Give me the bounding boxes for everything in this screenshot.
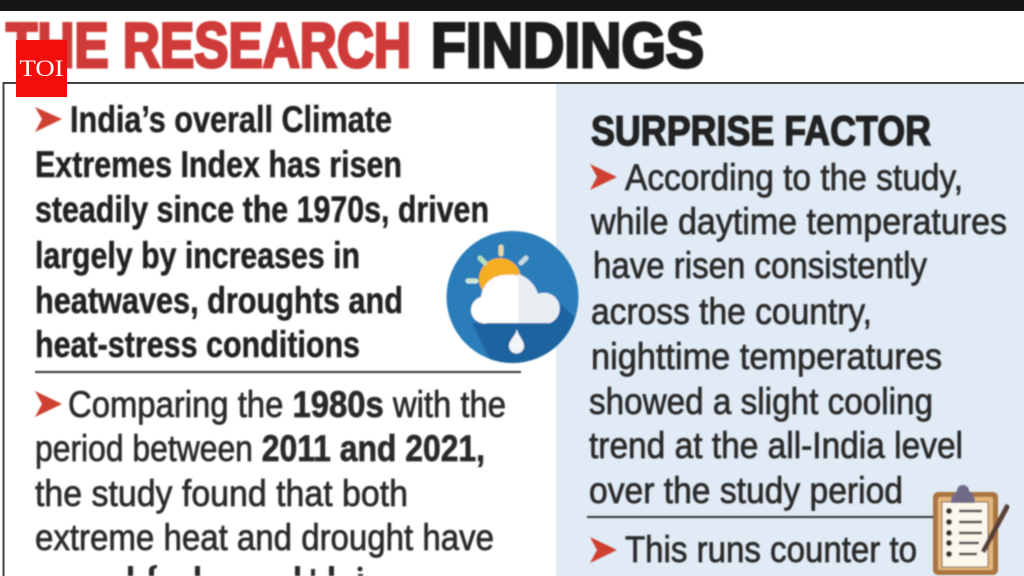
TOI badge	[16, 40, 67, 97]
icon: red arrow bullet 3	[590, 164, 617, 190]
icon: red arrow bullet 2	[35, 391, 62, 417]
first finding text: heat-stress conditions	[35, 324, 360, 365]
panel: surprise factor text	[587, 107, 1007, 570]
title: THE RESEARCH	[6, 11, 411, 81]
second finding text	[35, 384, 506, 558]
second finding text: extreme heat and drought have	[35, 517, 494, 558]
surprise finding text: across the country,	[591, 291, 872, 332]
surprise finding text: over the study period	[589, 470, 903, 511]
first finding text: steadily since the 1970s, driven	[35, 189, 489, 230]
TOI badge: TOI	[20, 56, 64, 81]
icon: clipboard with pen	[933, 485, 1008, 575]
first finding text: heatwaves, droughts and	[35, 280, 403, 321]
surprise finding text: nighttime temperatures	[591, 336, 942, 377]
first finding text: India’s overall Climate	[70, 99, 392, 140]
surprise finding text: According to the study,	[625, 157, 963, 198]
top black bar	[0, 0, 1024, 11]
first finding text: largely by increases in	[35, 235, 360, 276]
cropped tops of the next text line at the image edge	[128, 565, 363, 576]
second finding text: Comparing the 1980s with the	[68, 384, 506, 425]
first finding text	[35, 99, 489, 365]
surprise finding text: have risen consistently	[593, 245, 927, 286]
first finding text: Extremes Index has risen	[35, 144, 402, 185]
heading: surprise factor: SURPRISE FACTOR	[591, 107, 931, 154]
icon: red arrow bullet 4	[590, 537, 617, 563]
icon: weather sun cloud rain	[445, 230, 580, 364]
surprise finding text: trend at the all-India level	[589, 425, 963, 466]
closing line text: This runs counter to	[625, 529, 917, 570]
panel: left findings text	[35, 99, 521, 576]
surprise finding text: showed a slight cooling	[589, 381, 933, 422]
title: FINDINGS	[431, 11, 704, 81]
icon: red arrow bullet 1	[35, 107, 62, 132]
second finding text: the study found that both	[35, 473, 408, 514]
surprise finding text	[589, 157, 1007, 511]
panel: surprise factor background	[556, 84, 1024, 576]
second finding text: period between 2011 and 2021,	[35, 428, 485, 469]
